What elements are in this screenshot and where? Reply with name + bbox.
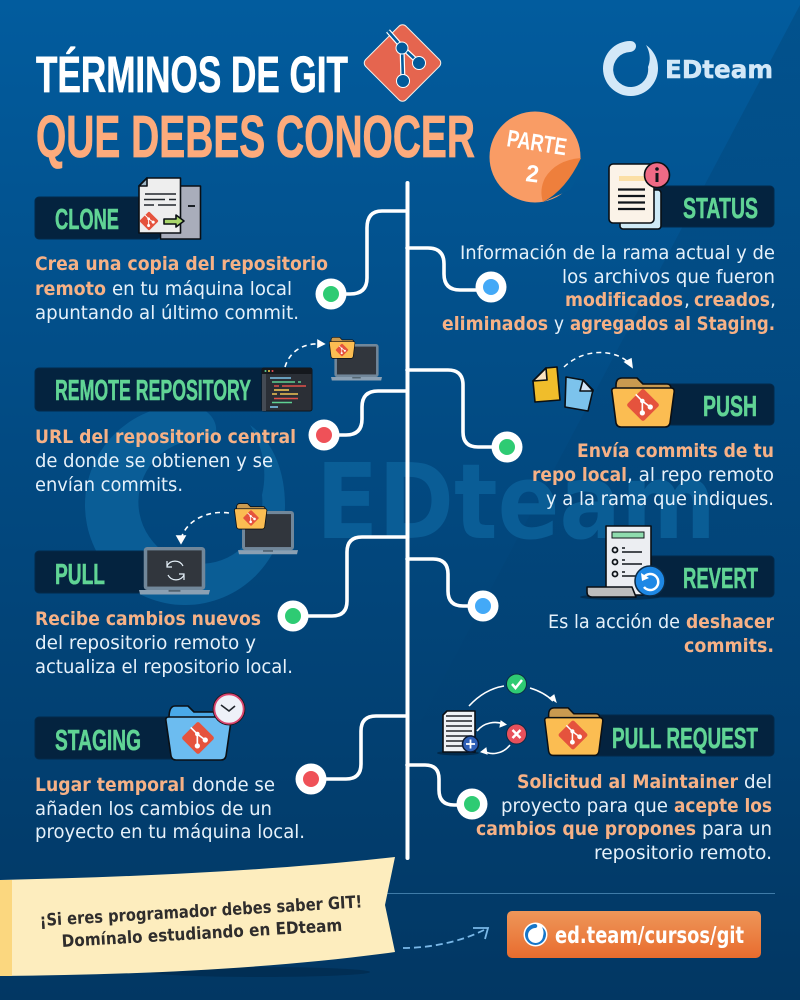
arrow: dashed to pull laptop: [177, 512, 229, 543]
staging description: añaden los cambios de un: [35, 799, 272, 820]
status label: STATUS: [683, 193, 758, 225]
push description: [532, 441, 774, 510]
status description: Información de la rama actual y de: [460, 243, 775, 264]
arrow: dashed to remote laptop: [285, 340, 324, 367]
sticker: parte 2: 2: [524, 160, 540, 189]
status description: ,: [684, 290, 690, 311]
revert description: [548, 612, 775, 657]
push description: y a la rama que indiques.: [546, 489, 774, 510]
sticker: parte 2: PARTE: [505, 125, 569, 161]
revert description: commits.: [684, 636, 774, 657]
clone label: CLONE: [55, 204, 119, 236]
icon: blue folder with clock: [166, 693, 245, 760]
staging description: [35, 775, 305, 843]
push description: , al repo remoto: [627, 465, 774, 486]
push description: repo local: [532, 465, 627, 486]
status description: [442, 243, 776, 335]
icon: status document: [609, 162, 670, 229]
icon: source laptop with folder: [234, 504, 298, 554]
revert label: REVERT: [683, 563, 758, 595]
pull request description: para un: [702, 819, 772, 840]
status description: agregados al Staging.: [570, 314, 775, 335]
icon: approved path with check: [469, 674, 556, 706]
remote repository description: de donde se obtienen y se: [35, 451, 273, 472]
panel: status: [442, 162, 776, 335]
revert description: deshacer: [686, 612, 775, 633]
remote repository label: REMOTE REPOSITORY: [55, 375, 251, 407]
pull description: del repositorio remoto y: [35, 633, 256, 654]
push description: Envía commits de tu: [577, 441, 774, 462]
clone description: apuntando al último commit.: [35, 303, 299, 324]
staging label: STAGING: [55, 725, 141, 757]
callout ribbon: Domínalo estudiando en EDteam: [61, 916, 343, 952]
status description: y: [554, 314, 564, 335]
watermark: EDteam logo: EDteam: [316, 441, 716, 563]
ribbon shadow: [150, 967, 370, 977]
remote repository label bar: [35, 368, 270, 411]
status description: los archivos que fueron: [562, 267, 775, 288]
callout ribbon: ¡Si eres programador debes saber GIT!: [39, 892, 363, 931]
push label bar: [665, 384, 774, 425]
title: [36, 46, 475, 170]
pull label bar: [35, 551, 150, 593]
remote repository description: URL del repositorio central: [35, 427, 296, 448]
icon: revert document: [580, 526, 665, 600]
staging label bar: [35, 717, 175, 759]
panel: staging: [35, 693, 305, 843]
clone description: en tu máquina local: [112, 279, 292, 300]
icon: laptop with sync symbol: [139, 547, 210, 594]
status description: eliminados: [442, 314, 548, 335]
EDteam logo: [603, 41, 773, 96]
pull request description: [476, 772, 772, 864]
push label: PUSH: [703, 391, 757, 423]
icon: yellow and blue files: [533, 367, 593, 411]
callout ribbon: [0, 857, 395, 976]
pull label: PULL: [55, 559, 105, 591]
pull request description: acepte los: [674, 796, 772, 817]
status description: modificados: [565, 290, 683, 311]
panel: clone: [35, 178, 328, 324]
sticker: parte 2: [490, 112, 585, 202]
clone description: [35, 254, 328, 324]
timeline trunk and branches: [296, 183, 505, 858]
remote repository description: envían commits.: [35, 475, 183, 496]
pull request description: del: [744, 772, 772, 793]
remote repository description: [35, 427, 296, 496]
button: course link: ed.team/cursos/git: [555, 923, 744, 949]
watermark: EDteam logo: [85, 405, 716, 605]
icon: request document with plus: [437, 711, 479, 756]
icon: remote laptop with folder: [329, 337, 382, 381]
pull request description: proyecto para que: [501, 796, 668, 817]
status label bar: [655, 186, 774, 227]
EDteam logo: EDteam: [665, 55, 773, 84]
staging description: Lugar temporal: [35, 775, 185, 796]
status description: ,: [770, 290, 776, 311]
clone description: Crea una copia del repositorio: [35, 254, 328, 275]
title: QUE DEBES CONOCER: [36, 104, 475, 170]
pull request description: Solicitud al Maintainer: [517, 772, 739, 793]
pull description: actualiza el repositorio local.: [35, 657, 293, 678]
pull request description: cambios que propones: [476, 819, 696, 840]
title: TÉRMINOS DE GIT: [36, 46, 348, 103]
arrow: dashed to folder: [564, 352, 632, 367]
icon: rejected path with cross: [477, 721, 526, 754]
button: course link: [507, 911, 761, 958]
pull description: Recibe cambios nuevos: [35, 609, 261, 630]
pull request label bar: [590, 715, 774, 756]
panel: pull request: [437, 674, 774, 864]
footer divider: [380, 893, 775, 894]
staging description: donde se: [192, 775, 275, 796]
arrow: dashed to course button: [403, 928, 488, 948]
panel: pull: [35, 504, 298, 678]
icon: repo folder: [612, 378, 674, 427]
pull description: [35, 609, 293, 678]
timeline nodes: [278, 272, 522, 820]
staging description: proyecto en tu máquina local.: [35, 822, 305, 843]
panel: revert: [548, 526, 775, 657]
panel: remote repository: [35, 337, 382, 496]
icon: clone document and server: [139, 178, 200, 239]
status description: creados: [694, 290, 770, 311]
revert description: Es la acción de: [548, 612, 680, 633]
pull request description: repositorio remoto.: [594, 843, 772, 864]
background diagonal band: [400, 5, 800, 760]
clone label bar: [35, 197, 160, 239]
icon: repo folder: [545, 708, 603, 755]
panel: push: [532, 352, 774, 510]
icon: git logo: [362, 23, 443, 103]
icon: code editor: [262, 368, 312, 411]
revert label bar: [645, 556, 774, 597]
clone description: remoto: [35, 279, 106, 300]
